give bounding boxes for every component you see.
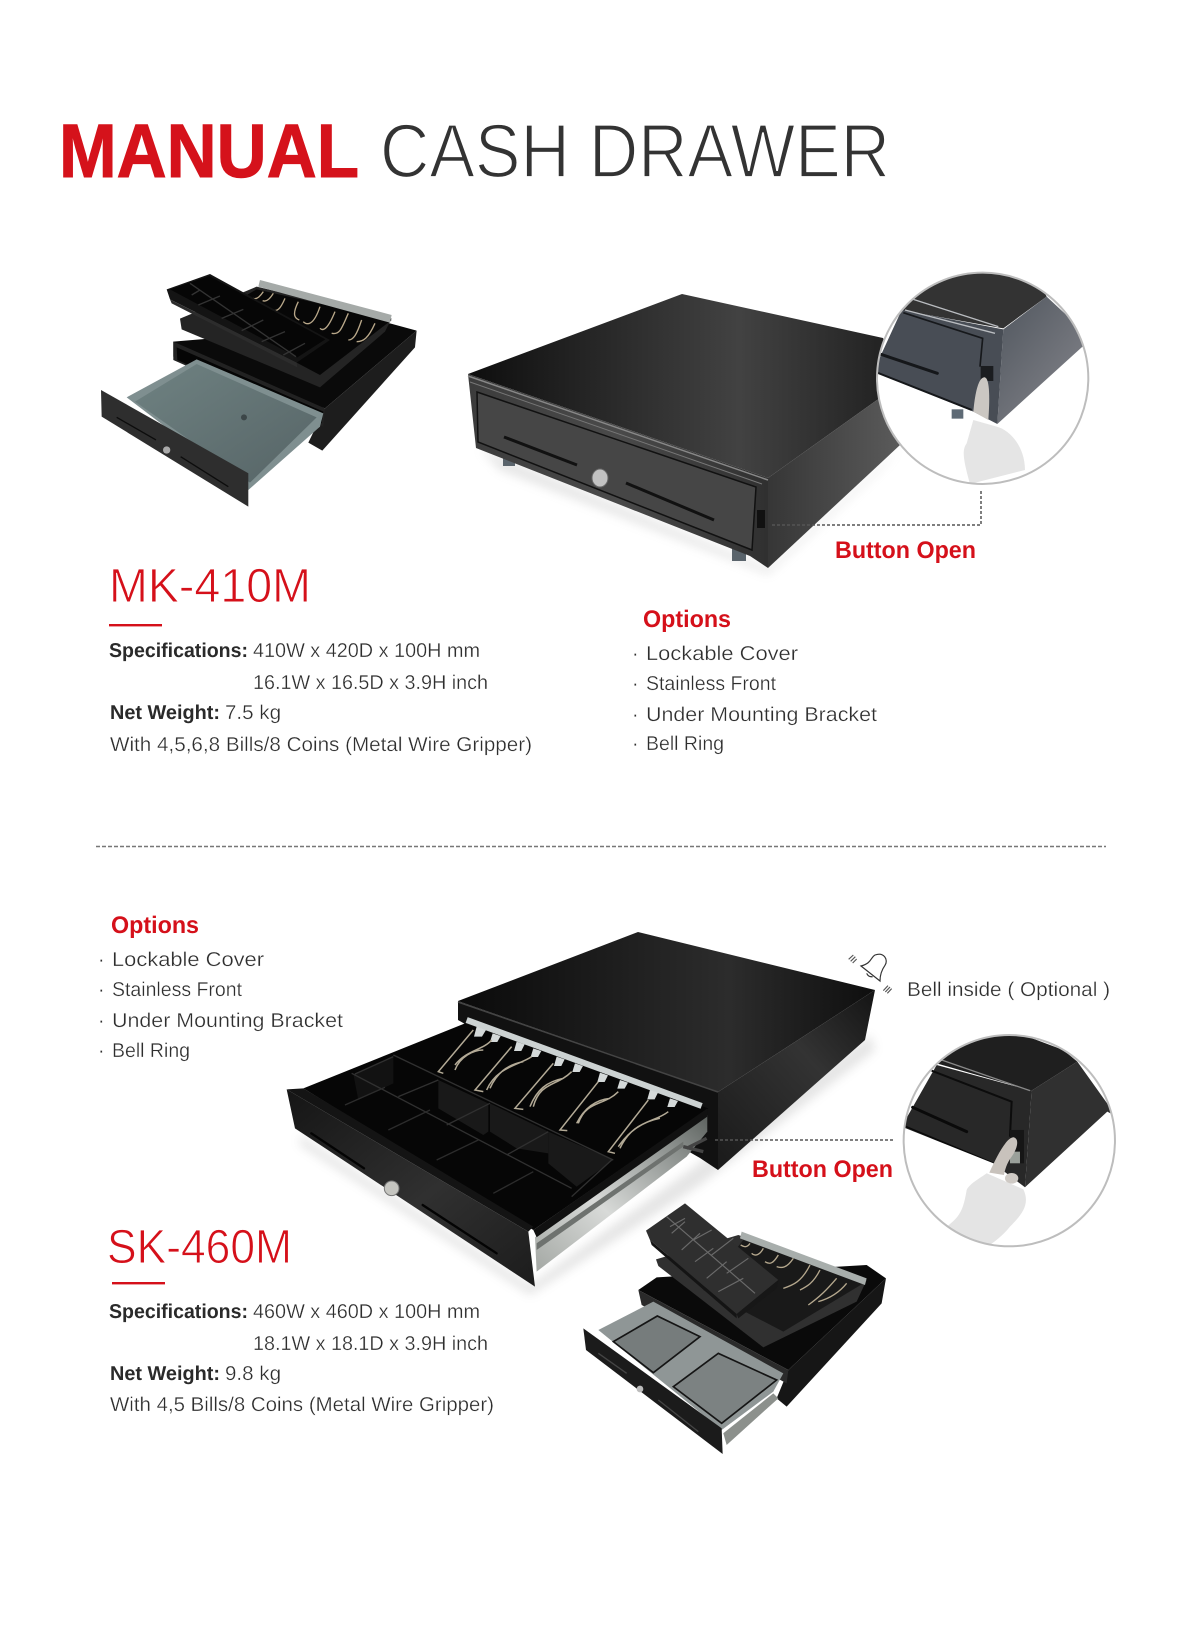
specifications MK-410M: With 4,5,6,8 Bills/8 Coins (Metal Wire Gripper) (110, 734, 532, 756)
options SK-460M: Stainless Front (112, 979, 242, 1001)
options MK-410M: Options (643, 606, 731, 633)
button open label MK-410M: Button Open (835, 537, 976, 564)
options MK-410M: Under Mounting Bracket (646, 704, 877, 726)
specifications SK-460M: Specifications: (109, 1301, 248, 1323)
model name SK-460M: SK-460M (107, 1221, 292, 1274)
specifications MK-410M (109, 640, 532, 756)
options MK-410M: Stainless Front (646, 673, 776, 695)
model name MK-410M: MK-410M (109, 560, 311, 613)
callout circle: SK-460M button detail (902, 1030, 1117, 1247)
red rule SK-460M (112, 1282, 165, 1284)
options MK-410M: · (632, 673, 639, 695)
product photo: MK-410M closed drawer (468, 294, 905, 574)
bell inside label: Bell inside ( Optional ) (907, 979, 1110, 1001)
options MK-410M: Bell Ring (646, 733, 724, 755)
options SK-460M: Bell Ring (112, 1040, 190, 1062)
red rule MK-410M (109, 624, 162, 626)
title: CASH DRAWER (380, 109, 890, 194)
options SK-460M: Options (111, 912, 199, 939)
options SK-460M (98, 912, 343, 1062)
specifications SK-460M: With 4,5 Bills/8 Coins (Metal Wire Gripper) (110, 1394, 494, 1416)
specifications MK-410M: 410W x 420D x 100H mm (253, 640, 480, 662)
specifications MK-410M: Specifications: (109, 640, 248, 662)
options SK-460M: Under Mounting Bracket (112, 1010, 343, 1032)
specifications SK-460M (109, 1301, 494, 1416)
options MK-410M: Lockable Cover (646, 643, 798, 665)
options SK-460M: · (98, 979, 105, 1001)
title: MANUAL (59, 109, 359, 194)
options MK-410M: · (632, 643, 639, 665)
options MK-410M: · (632, 733, 639, 755)
specifications MK-410M: Net Weight: (110, 702, 220, 724)
options MK-410M (632, 606, 877, 755)
specifications SK-460M: 18.1W x 18.1D x 3.9H inch (253, 1333, 488, 1355)
specifications SK-460M: 9.8 kg (225, 1363, 281, 1385)
specifications MK-410M: 16.1W x 16.5D x 3.9H inch (253, 672, 488, 694)
options SK-460M: · (98, 1010, 105, 1032)
product photo: MK-410M open drawer with trays (101, 274, 417, 507)
specifications SK-460M: Net Weight: (110, 1363, 220, 1385)
options SK-460M: · (98, 949, 105, 971)
options SK-460M: Lockable Cover (112, 949, 264, 971)
button open label SK-460M: Button Open (752, 1156, 893, 1183)
title (59, 109, 890, 194)
specifications MK-410M: 7.5 kg (225, 702, 281, 724)
bell icon (849, 954, 892, 993)
options MK-410M: · (632, 704, 639, 726)
product photo: SK-460M open drawer (287, 932, 875, 1295)
options SK-460M: · (98, 1040, 105, 1062)
callout circle: MK-410M button detail (873, 270, 1093, 484)
dashed leader: button open SK-460M (715, 1139, 893, 1141)
product photo: SK-460M open drawer with trays (583, 1203, 886, 1454)
dashed leader: button open MK-410M (772, 490, 981, 525)
specifications SK-460M: 460W x 460D x 100H mm (253, 1301, 480, 1323)
